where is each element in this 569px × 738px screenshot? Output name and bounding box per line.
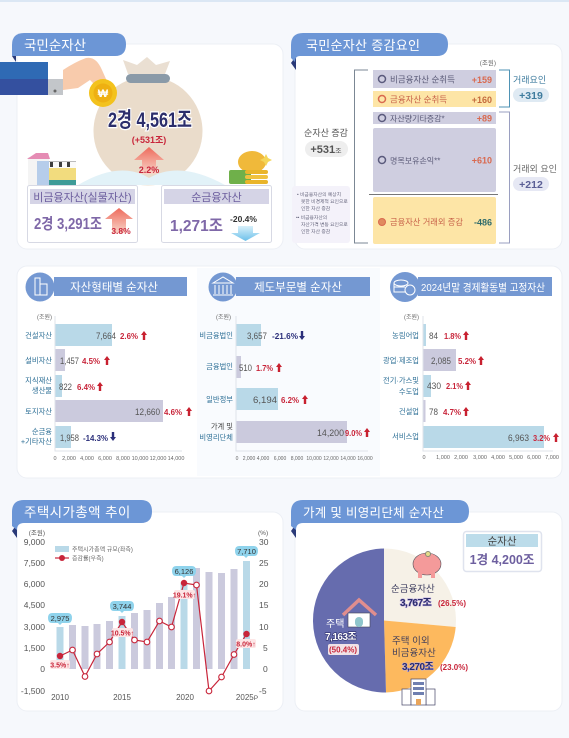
percent changes: 2.1%	[446, 381, 463, 391]
icon and heading: asset type: 자산형태별 순자산	[70, 281, 158, 294]
values: 78	[429, 407, 438, 418]
card: net financial assets	[162, 186, 272, 242]
axis ticks: 12,000	[150, 456, 166, 462]
footnote box: 인한 자산 증감	[301, 228, 331, 235]
label: transaction factors: +319	[519, 90, 543, 102]
values: 510	[239, 363, 252, 374]
category labels: 비금융법인	[199, 331, 233, 340]
icon: money and coins	[229, 151, 272, 189]
heading tab: change factors: 국민순자산 증감요인	[306, 38, 420, 53]
left axis: 9,000	[24, 537, 45, 547]
icon: buildings and factory	[27, 153, 76, 185]
percent changes: 4.6%	[164, 407, 182, 417]
right axis	[258, 530, 269, 696]
label: net asset change	[304, 127, 348, 157]
unit label: (조원)	[216, 313, 231, 321]
legend: 증감률(우측)	[72, 554, 104, 562]
axis ticks	[53, 456, 184, 462]
row: financial acquisition: 금융자산 순취득	[390, 94, 447, 104]
axis ticks: 12,000	[323, 456, 339, 462]
percent changes: -14.3%	[83, 433, 108, 443]
category labels	[21, 331, 52, 446]
axis ticks	[236, 456, 373, 462]
row: non-financial acquisition: +159	[472, 75, 492, 85]
values	[239, 331, 344, 439]
percent changes	[256, 331, 362, 438]
category labels: +기타자산	[21, 437, 52, 446]
axis ticks: 2,000	[62, 456, 76, 462]
percent changes: 3.2%	[533, 433, 550, 443]
percent changes: 6.2%	[281, 395, 299, 405]
axis ticks	[422, 455, 559, 461]
axis ticks: 14,000	[168, 456, 184, 462]
axis	[55, 316, 182, 451]
line: growth rate	[57, 580, 250, 694]
bars: activity	[423, 324, 544, 448]
axis ticks: 16,000	[357, 456, 373, 462]
callouts: value: 6,126	[175, 567, 193, 576]
callouts: growth rate: 10.5%↑	[111, 630, 134, 638]
label: transaction factors: 거래요인	[513, 75, 546, 85]
card: net financial assets: 순금융자산	[191, 191, 242, 204]
callouts: value: 7,710	[237, 547, 256, 556]
label: net financial assets	[391, 584, 466, 609]
axis ticks: 0	[53, 456, 57, 462]
row: nominal holding gains: 명목보유손익**	[390, 156, 440, 166]
values	[427, 331, 529, 444]
icon and heading: asset type	[26, 272, 187, 302]
row: financial acquisition: +160	[472, 95, 492, 105]
category labels: 수도업	[399, 387, 419, 396]
left axis	[21, 528, 45, 696]
label: non-transaction factors: 거래외 요인	[513, 163, 557, 174]
label: non-transaction factors: +212	[519, 179, 543, 191]
panel: national net assets	[0, 33, 283, 249]
category labels: 일반정부	[206, 395, 233, 404]
label: housing	[325, 618, 359, 655]
row: financial non-transaction change: -486	[474, 218, 492, 228]
footnote box	[292, 186, 350, 243]
x axis labels: 2025P	[236, 693, 258, 702]
label: non-financial excluding housing: (23.0%)	[440, 663, 468, 672]
row: nominal holding gains	[373, 128, 496, 192]
left axis: 1,500	[24, 643, 45, 653]
category labels: 순금융	[32, 427, 52, 436]
footnote box: 인한 자산 증감	[301, 205, 331, 212]
category labels: 토지자산	[25, 407, 52, 416]
legend: 주택시가총액 규모(좌측)	[72, 546, 133, 554]
card: non-financial assets: 2경 3,291조	[34, 215, 102, 233]
right axis: 5	[263, 643, 268, 653]
icon: hand with coin: ₩	[98, 88, 109, 100]
category labels: 건설업	[399, 407, 419, 416]
trend arrows	[276, 331, 370, 437]
footnote box: •• 비금융자산의	[296, 214, 327, 221]
axis ticks: 4,000	[491, 455, 505, 461]
callouts: growth rate: 3.5%↑	[50, 662, 70, 670]
card: net financial assets: 1,271조	[170, 218, 223, 235]
row: financial acquisition	[373, 91, 496, 107]
unit label: (조원)	[404, 313, 419, 321]
callouts: growth rate	[50, 590, 256, 670]
callout: total net assets: 1경 4,200조	[470, 553, 534, 567]
icon and heading: sector: 제도부문별 순자산	[254, 281, 342, 294]
label: net financial assets: (26.5%)	[438, 599, 466, 608]
icon and heading: activity: 2024년말 경제활동별 고정자산	[421, 281, 545, 294]
left axis: 3,000	[24, 622, 45, 632]
values: 3,657	[247, 331, 267, 342]
values: 12,660	[135, 407, 160, 418]
x axis labels: 2020	[176, 693, 194, 702]
category labels: 가계 및	[211, 422, 233, 431]
axis ticks: 10,000	[132, 456, 148, 462]
heading tab: housing: 주택시가총액 추이	[24, 505, 131, 520]
category labels: 설비자산	[25, 356, 52, 365]
percent changes: 6.4%	[77, 382, 95, 392]
trend arrows	[97, 331, 192, 441]
callouts: value: 2,975	[51, 614, 69, 623]
row: financial non-transaction change: 금융자산 거래외 증감	[390, 217, 463, 227]
label: non-financial excluding housing: 비금융자산	[392, 648, 436, 659]
row: other volume changes	[373, 112, 496, 124]
axis ticks: 8,000	[291, 456, 303, 462]
axis ticks: 5,000	[509, 455, 523, 461]
card: net financial assets: -20.4%	[230, 214, 257, 224]
label: transaction factors	[513, 75, 549, 102]
chart: net assets by institutional sector	[199, 272, 373, 462]
percent changes: -21.6%	[272, 331, 298, 341]
values: 430	[427, 381, 441, 392]
icon: piggy bank	[413, 552, 441, 578]
label: housing: 7,163조	[325, 631, 357, 643]
category labels: 광업·제조업	[383, 356, 419, 365]
card: non-financial assets	[28, 186, 138, 242]
callout: total net assets: 순자산	[488, 536, 517, 548]
label: non-financial excluding housing	[392, 635, 468, 673]
percent changes	[77, 331, 182, 443]
axis ticks: 3,000	[473, 455, 487, 461]
callouts: value	[48, 546, 258, 625]
values: 6,194	[253, 395, 277, 406]
row: financial non-transaction change	[373, 197, 496, 244]
x axis labels: 2015	[113, 693, 131, 702]
left axis: -1,500	[21, 686, 45, 696]
label: net financial assets: 3,767조	[400, 597, 432, 609]
right axis: 15	[259, 600, 269, 610]
heading tab: household	[291, 500, 469, 538]
divider line	[369, 194, 498, 196]
axis ticks: 14,000	[340, 456, 356, 462]
category labels: 지식재산	[25, 376, 52, 385]
icon: apartment building	[402, 679, 435, 705]
axis ticks: 8,000	[116, 456, 130, 462]
axis	[423, 316, 553, 451]
values: 822	[59, 382, 72, 393]
category labels: 금융법인	[206, 362, 233, 371]
panel: household net assets	[291, 500, 562, 711]
chart: net assets by asset type	[21, 272, 192, 462]
label: housing: (50.4%)	[329, 646, 357, 654]
right axis: 30	[259, 537, 269, 547]
percent changes: 4.7%	[443, 407, 461, 417]
heading tab: change factors	[291, 33, 448, 70]
heading tab: national net assets: 국민순자산	[24, 38, 86, 53]
heading tab: national net assets	[12, 33, 126, 62]
right axis: 10	[259, 622, 269, 632]
row: other volume changes: 자산량기타증감*	[390, 114, 445, 124]
category labels	[199, 331, 233, 442]
label: non-financial excluding housing: 주택 이외	[392, 635, 430, 647]
percent changes: 9.0%	[345, 428, 362, 438]
footnote box: • 비금융자산의 예상치	[297, 191, 341, 198]
axis ticks: 2,000	[243, 456, 255, 462]
heading tab: housing	[12, 500, 152, 538]
row: other volume changes: +89	[477, 114, 492, 124]
change value: (+531조)	[132, 135, 166, 145]
percent changes: 4.5%	[82, 356, 100, 366]
category labels: 생산물	[32, 386, 52, 395]
category labels	[383, 331, 419, 441]
percent changes: 5.2%	[458, 356, 476, 366]
legend	[55, 546, 133, 562]
icon: money bag	[94, 57, 202, 186]
card: non-financial assets: 3.8%	[111, 226, 131, 236]
footnote box: 자산가격 변동 요인으로	[301, 221, 348, 228]
category labels: 전기·가스및	[383, 376, 419, 385]
values: 1,958	[60, 433, 79, 444]
icon and heading: sector	[208, 272, 370, 302]
axis ticks: 6,000	[274, 456, 286, 462]
left axis: 0	[40, 664, 45, 674]
axis ticks: 4,000	[80, 456, 94, 462]
left axis: 4,500	[24, 600, 45, 610]
chart: fixed assets by economic activity	[383, 272, 559, 461]
right axis: (%)	[258, 530, 268, 537]
axis ticks: 7,000	[545, 455, 559, 461]
category labels: 농림어업	[392, 331, 419, 340]
icon: up arrow total	[134, 147, 164, 174]
axis ticks: 1,000	[436, 455, 450, 461]
right axis: 20	[259, 579, 269, 589]
light reflection under bag	[78, 170, 225, 185]
left axis: 6,000	[24, 579, 45, 589]
left axis: 7,500	[24, 558, 45, 568]
label: non-financial excluding housing: 3,270조	[402, 661, 434, 673]
percent changes: 1.8%	[444, 331, 461, 341]
callout: total net assets	[464, 532, 542, 572]
pie chart	[313, 548, 456, 693]
values	[59, 331, 160, 444]
values: 84	[429, 331, 438, 342]
unit label: (조원)	[480, 58, 496, 67]
axis ticks: 2,000	[454, 455, 468, 461]
bars: sector	[236, 324, 347, 443]
axis ticks: 10,000	[306, 456, 322, 462]
axis ticks: 0	[236, 456, 239, 462]
left bracket	[354, 70, 368, 243]
trend arrows	[463, 331, 559, 442]
label: net asset change: 순자산 증감	[304, 127, 348, 138]
right bracket: non-transaction factors	[499, 112, 510, 243]
panel: middle charts	[17, 266, 562, 478]
right axis: -5	[259, 686, 267, 696]
bars: housing market value	[56, 561, 250, 669]
row: non-financial acquisition: 비금융자산 순취득	[390, 74, 455, 84]
callouts: value: 3,744	[113, 602, 131, 611]
axis	[236, 316, 368, 451]
right bracket: transaction factors	[499, 70, 510, 107]
icon: hand with coin	[0, 58, 117, 107]
values: 6,963	[508, 433, 529, 444]
heading tab: household: 가계 및 비영리단체 순자산	[303, 506, 444, 520]
values: 14,200	[317, 428, 344, 439]
category labels: 비영리단체	[199, 433, 233, 442]
panel: net asset change factors	[291, 33, 562, 249]
callouts: growth rate: 8.0%↑	[236, 642, 256, 648]
percent changes: 1.7%	[256, 363, 273, 373]
icon and heading: activity	[390, 272, 552, 302]
callouts: growth rate: 19.1%↑	[173, 592, 196, 600]
row: non-financial acquisition	[373, 70, 496, 88]
row: nominal holding gains: +610	[472, 156, 492, 166]
percent changes: 2.6%	[120, 331, 138, 341]
label: net asset change: +531조	[310, 144, 342, 156]
x axis labels: 2010	[51, 693, 69, 702]
values: 2,085	[431, 356, 451, 367]
x axis labels	[51, 693, 258, 702]
values: 1,457	[60, 356, 79, 367]
label: non-transaction factors	[513, 163, 557, 191]
label: net financial assets: 순금융자산	[391, 584, 435, 595]
right axis: 25	[259, 558, 269, 568]
total value: 2경 4,561조	[108, 109, 192, 132]
values: 7,664	[96, 331, 116, 342]
category labels: 서비스업	[392, 432, 419, 441]
percent changes	[443, 331, 550, 443]
axis ticks: 4,000	[257, 456, 269, 462]
axis ticks: 6,000	[98, 456, 112, 462]
icon: house	[343, 600, 376, 627]
left axis: (조원)	[29, 528, 45, 537]
axis ticks: 6,000	[527, 455, 541, 461]
footnote box: 못한 비경제적 요인으로	[301, 198, 348, 205]
label: housing: 주택	[326, 618, 344, 630]
category labels: 건설자산	[25, 331, 52, 340]
bars: asset type	[55, 324, 163, 448]
right axis: 0	[263, 664, 268, 674]
axis ticks: 0	[422, 455, 426, 461]
card: non-financial assets: 비금융자산(실물자산)	[33, 191, 132, 204]
unit label: (조원)	[37, 313, 52, 321]
total percent: 2.2%	[139, 165, 159, 175]
panel: housing market value trend	[12, 500, 283, 711]
